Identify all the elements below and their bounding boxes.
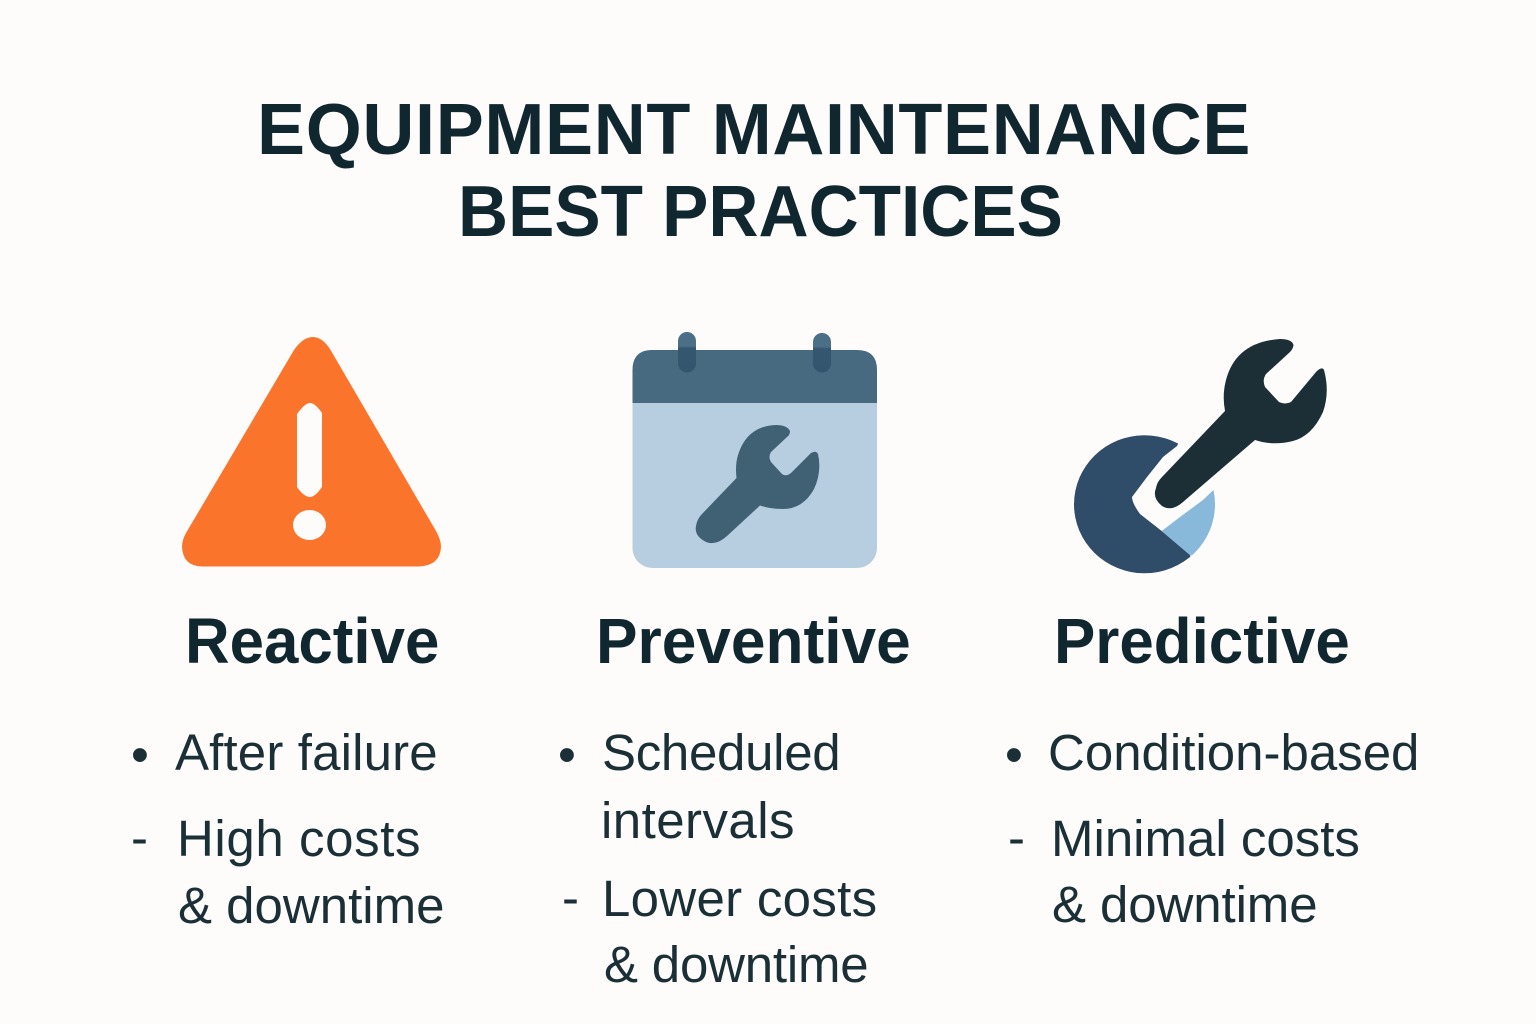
bullets: Predictive: • — [1005, 726, 1023, 783]
gauge: dark sector — [1074, 435, 1190, 574]
title: EQUIPMENT MAINTENANCE — [257, 90, 1251, 170]
heading: Preventive: Preventive — [596, 605, 911, 677]
heading: Reactive: Reactive — [185, 605, 439, 677]
bullets: Predictive: - — [1008, 809, 1025, 866]
bullets: Preventive: - — [562, 869, 579, 926]
column: Predictive — [1005, 605, 1419, 933]
bullets: Predictive — [1005, 724, 1419, 933]
bullets: Reactive: • — [131, 726, 149, 783]
title: BEST PRACTICES — [458, 172, 1063, 252]
bullets: Preventive: intervals — [601, 792, 795, 849]
icon: gauge with wrench — [1074, 339, 1327, 574]
bullets: Reactive: & downtime — [178, 877, 444, 934]
bullets: Reactive: High costs — [177, 810, 421, 867]
bullets: Predictive: & downtime — [1052, 876, 1317, 933]
column: Reactive — [131, 605, 444, 934]
bullets: Preventive: Lower costs — [602, 870, 877, 927]
bullets: Predictive: Minimal costs — [1051, 810, 1360, 867]
icon: warning triangle — [182, 337, 441, 566]
bullets: Preventive — [558, 724, 877, 993]
bullets: Reactive: - — [131, 809, 148, 866]
title — [257, 90, 1251, 252]
bullets: Reactive: After failure — [175, 724, 438, 781]
bullets: Preventive: • — [558, 726, 576, 783]
wrench — [1155, 339, 1327, 508]
icon: calendar with wrench — [632, 332, 877, 568]
gauge: light sector — [1162, 490, 1215, 556]
bullets: Preventive: Scheduled — [602, 724, 840, 781]
bullets: Predictive: Condition-based — [1048, 724, 1419, 781]
bullets: Reactive — [131, 724, 444, 934]
column: Preventive — [558, 605, 911, 993]
heading: Predictive: Predictive — [1054, 605, 1350, 677]
bullets: Preventive: & downtime — [604, 936, 868, 993]
